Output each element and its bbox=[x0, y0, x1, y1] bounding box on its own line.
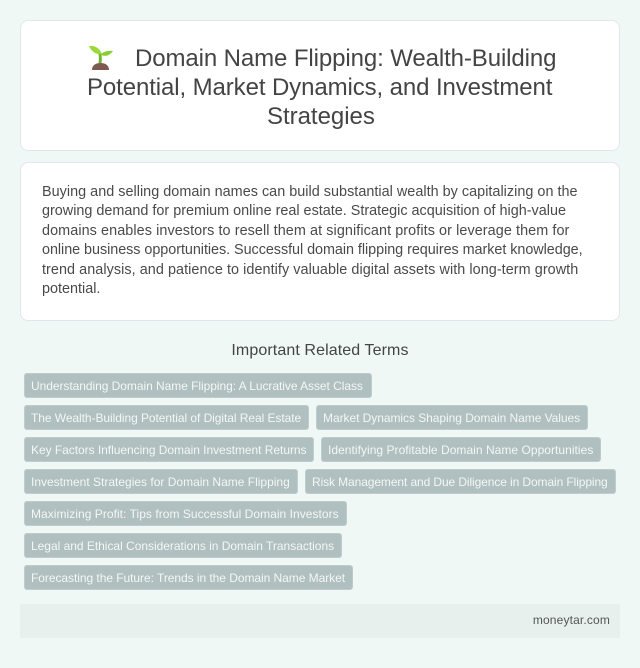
tag bbox=[24, 469, 298, 494]
text line 2: growing demand for premium online real estate. Strategic acquisition of high-value bbox=[42, 203, 566, 219]
title panel bbox=[20, 20, 620, 151]
text line 4: online business opportunities. Successful domain flipping requires market knowledge, bbox=[42, 242, 583, 258]
icon: seedling bbox=[89, 46, 113, 70]
footer bbox=[20, 604, 620, 638]
tag: Market Dynamics Shaping Domain Name Values bbox=[323, 411, 580, 425]
tag bbox=[305, 469, 616, 494]
summary panel bbox=[20, 162, 620, 321]
tag: Risk Management and Due Diligence in Domain Flipping bbox=[312, 475, 608, 489]
title bbox=[87, 45, 556, 130]
title line 3: Strategies bbox=[267, 103, 375, 130]
tag: Understanding Domain Name Flipping: A Lucrative Asset Class bbox=[31, 379, 363, 393]
text line 3: domains enables investors to resell them at significant profits or leverage them for bbox=[42, 223, 569, 239]
tag bbox=[321, 437, 601, 462]
heading: related terms: Important Related Terms bbox=[231, 342, 409, 359]
tag bbox=[24, 437, 314, 462]
tag bbox=[316, 405, 588, 430]
tag: Maximizing Profit: Tips from Successful Domain Investors bbox=[31, 507, 339, 521]
tag: Key Factors Influencing Domain Investment Returns bbox=[31, 443, 306, 457]
footer: moneytar.com bbox=[533, 613, 610, 627]
tag: Legal and Ethical Considerations in Domain Transactions bbox=[31, 539, 334, 553]
tag: Identifying Profitable Domain Name Opportunities bbox=[328, 443, 593, 457]
title line 2: Potential, Market Dynamics, and Investment bbox=[87, 74, 552, 101]
tag bbox=[24, 533, 342, 558]
text line 5: trend analysis, and patience to identify valuable digital assets with long-term growth bbox=[42, 262, 578, 278]
tag bbox=[24, 565, 353, 590]
tag list bbox=[24, 373, 616, 590]
text line 1: Buying and selling domain names can build substantial wealth by capitalizing on the bbox=[42, 184, 578, 200]
tag: Forecasting the Future: Trends in the Domain Name Market bbox=[31, 571, 345, 585]
tag bbox=[24, 405, 309, 430]
summary text bbox=[42, 184, 583, 297]
tag: The Wealth-Building Potential of Digital Real Estate bbox=[31, 411, 301, 425]
text line 6: potential. bbox=[42, 281, 100, 297]
title line 1: Domain Name Flipping: Wealth-Building bbox=[135, 45, 556, 72]
tag bbox=[24, 501, 347, 526]
tag bbox=[24, 373, 372, 398]
tag: Investment Strategies for Domain Name Flipping bbox=[31, 475, 290, 489]
